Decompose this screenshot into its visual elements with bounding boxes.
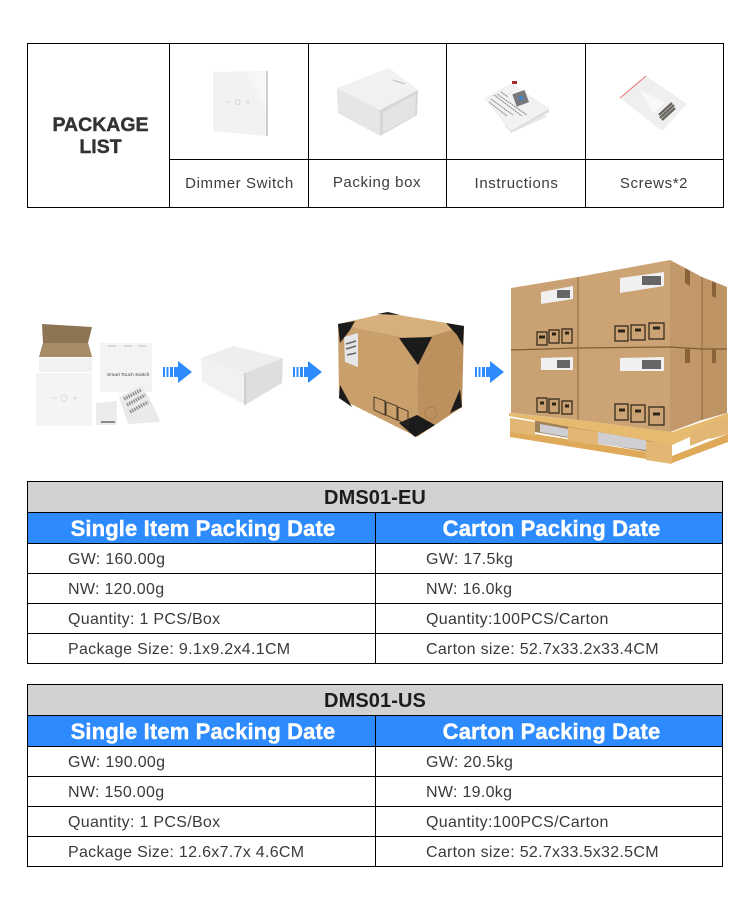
cell: NW: 16.0kg	[426, 581, 512, 598]
title: DMS01-US: DMS01-US	[324, 690, 426, 712]
panel: packing process flow	[36, 260, 728, 464]
icon: packing box	[337, 68, 418, 136]
table title bar: EU	[27, 481, 723, 513]
arrow: step one	[163, 361, 192, 383]
header: single item: Single Item Packing Date	[71, 719, 335, 744]
label: instructions: Instructions	[475, 175, 558, 192]
icon: instructions booklet	[485, 81, 549, 133]
header bar: US	[27, 716, 723, 747]
cell: GW: 160.00g	[68, 551, 165, 568]
cell: NW: 19.0kg	[426, 784, 512, 801]
image: pallet of cartons	[509, 260, 728, 464]
icon: screws bag	[620, 76, 687, 131]
header: single item: Single Item Packing Date	[71, 516, 335, 541]
cell: Quantity: 1 PCS/Box	[68, 814, 220, 831]
image: carton with corner protectors	[338, 312, 464, 437]
cell: Quantity: 1 PCS/Box	[68, 611, 220, 628]
cell: Package Size: 9.1x9.2x4.1CM	[68, 641, 290, 658]
cell: NW: 150.00g	[68, 784, 164, 801]
table: DMS01-EU	[27, 481, 723, 664]
cell: GW: 20.5kg	[426, 754, 513, 771]
cell: Quantity:100PCS/Carton	[426, 814, 609, 831]
heading: package list: LIST	[79, 136, 122, 158]
header: carton: Carton Packing Date	[443, 516, 660, 541]
cell: Quantity:100PCS/Carton	[426, 611, 609, 628]
image: opened box with contents	[36, 324, 160, 426]
panel: package list table	[27, 43, 724, 208]
title: DMS01-EU: DMS01-EU	[324, 487, 426, 509]
heading: package list: PACKAGE	[52, 114, 149, 136]
label: screws: Screws*2	[620, 175, 688, 192]
cell: NW: 120.00g	[68, 581, 164, 598]
arrow: step two	[293, 361, 322, 383]
label: dimmer switch: Dimmer Switch	[185, 175, 294, 192]
cell: GW: 17.5kg	[426, 551, 513, 568]
heading: package list	[52, 114, 149, 158]
text: box label: Smart Touch Switch	[107, 372, 150, 378]
image: closed white box	[201, 346, 283, 405]
cell: GW: 190.00g	[68, 754, 165, 771]
arrow: step three	[475, 361, 504, 383]
cell: Carton size: 52.7x33.5x32.5CM	[426, 844, 659, 861]
table: DMS01-US	[27, 684, 723, 867]
label: packing box: Packing box	[333, 174, 421, 191]
header bar: EU	[27, 513, 723, 544]
cell: Carton size: 52.7x33.2x33.4CM	[426, 641, 659, 658]
cell: Package Size: 12.6x7.7x 4.6CM	[68, 844, 304, 861]
header: carton: Carton Packing Date	[443, 719, 660, 744]
icon: dimmer switch	[213, 71, 268, 136]
table title bar: US	[27, 684, 723, 716]
